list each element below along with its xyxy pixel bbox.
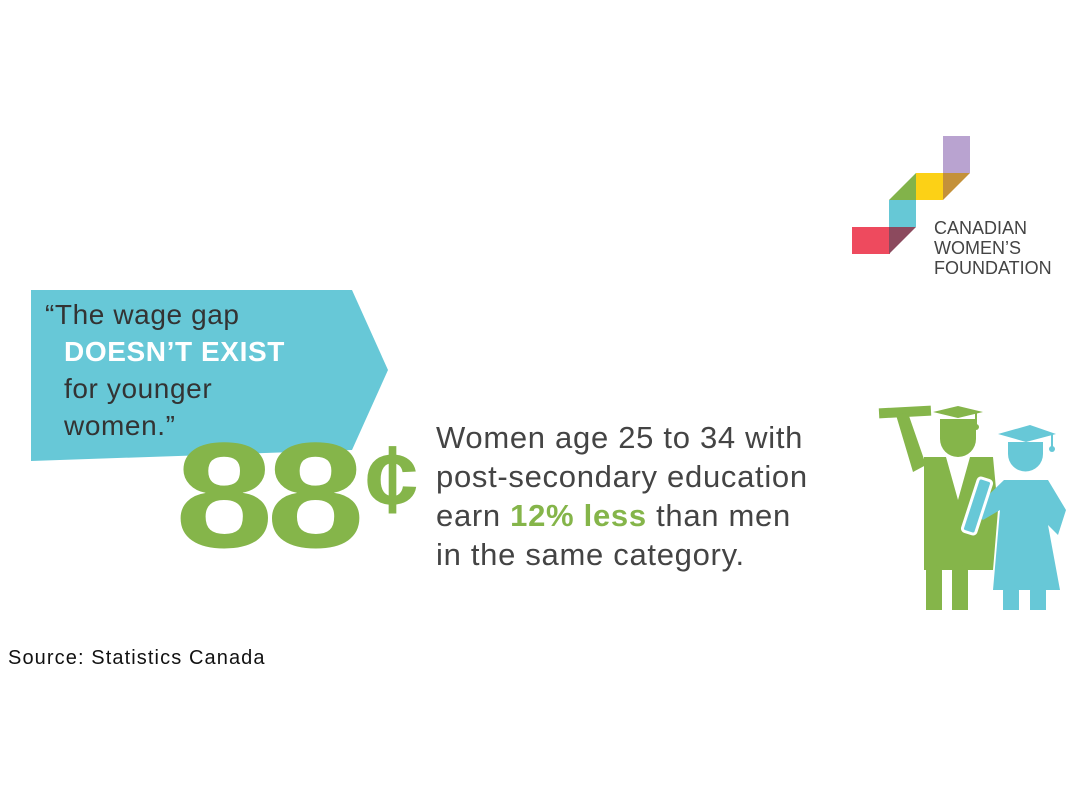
quote banner <box>31 290 388 461</box>
statistic text: in the same category. <box>436 537 745 572</box>
big number 88 cents: 88 <box>175 411 358 579</box>
statistic text: post-secondary education <box>436 459 808 494</box>
statistic text: earn 12% less than men <box>436 498 791 533</box>
quote text: for younger <box>64 373 212 404</box>
statistic text: Women age 25 to 34 with <box>436 420 803 455</box>
icon: graduates <box>878 406 1066 610</box>
big number 88 cents: ¢ <box>365 426 418 533</box>
logo: WOMEN’S <box>934 238 1021 258</box>
statistic text <box>436 420 808 572</box>
quote text <box>45 299 285 441</box>
logo: CANADIAN <box>934 218 1027 238</box>
quote text: women.” <box>64 410 176 441</box>
quote text: DOESN’T EXIST <box>64 336 285 367</box>
quote text: “The wage gap <box>45 299 240 330</box>
logo: FOUNDATION <box>934 258 1052 278</box>
logo <box>852 136 1052 278</box>
source: Source: Statistics Canada <box>8 647 266 669</box>
